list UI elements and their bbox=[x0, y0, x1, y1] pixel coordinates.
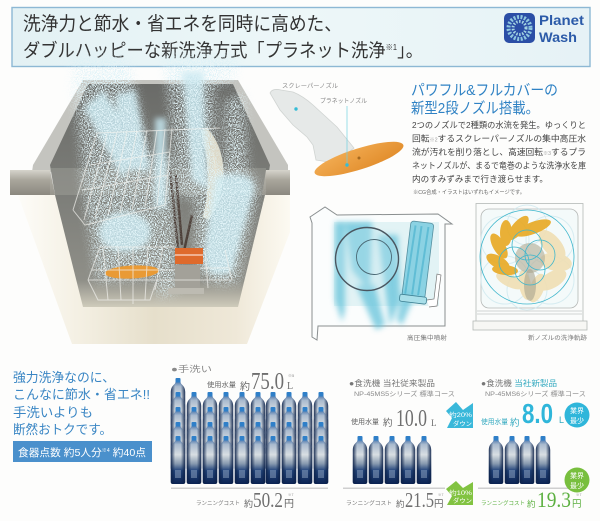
heading: 新型2段ノズル搭載。 bbox=[411, 100, 539, 117]
running cost: ※7 bbox=[438, 493, 444, 497]
orange nozzle in tub bbox=[105, 264, 159, 280]
heading: ●食洗機 当社従来製品 bbox=[349, 378, 435, 388]
title line 2: ダブルハッピーな新洗浄方式「プラネット洗浄 bbox=[23, 40, 412, 61]
model: NP-45MS5シリーズ 標準コース bbox=[354, 389, 455, 398]
title line 2: ※1 bbox=[385, 43, 398, 52]
water usage bbox=[351, 406, 436, 432]
side view diagram bbox=[310, 207, 452, 342]
running cost: 約 bbox=[527, 499, 536, 509]
badge: lowest running cost bbox=[564, 468, 590, 492]
badge: lowest water use bbox=[564, 402, 590, 428]
badge: lowest running cost: 業界 bbox=[570, 471, 584, 480]
body copy: 流が汚れを削り落とし、高速回転 ※3するプラ bbox=[412, 147, 586, 157]
upper rails bbox=[32, 80, 288, 172]
running cost: 50.2 bbox=[253, 488, 283, 512]
running cost bbox=[346, 488, 444, 512]
body copy bbox=[412, 120, 586, 184]
header banner bbox=[12, 8, 590, 66]
message text: 断然おトクです。 bbox=[13, 422, 112, 437]
trajectory caption: 新ノズルの洗浄軌跡 bbox=[528, 334, 587, 342]
running cost: ランニングコスト bbox=[346, 499, 392, 507]
title line 2: 」。 bbox=[397, 40, 423, 61]
logo wordmark bbox=[539, 12, 584, 45]
water usage: 使用水量 bbox=[351, 417, 379, 426]
cup holder bbox=[427, 274, 441, 307]
body copy: 回転※2するスクレーパーノズルの集中高圧水 bbox=[412, 134, 586, 144]
water usage bbox=[481, 398, 564, 429]
planet nozzle bbox=[311, 135, 407, 183]
water usage: 10.0 bbox=[396, 406, 427, 432]
front rim left bbox=[10, 170, 55, 195]
water usage: ※5 bbox=[288, 373, 295, 378]
water usage: 75.0 bbox=[251, 369, 284, 395]
water usage: 約 bbox=[510, 417, 520, 429]
savings message bbox=[13, 370, 152, 462]
running cost: 円 bbox=[434, 499, 444, 510]
grey centre bbox=[515, 243, 545, 273]
running cost: 円 bbox=[284, 499, 294, 510]
heading: パワフル&フルカバーの bbox=[411, 82, 558, 99]
message text: 手洗いよりも bbox=[13, 405, 93, 420]
running cost: 約 bbox=[396, 499, 405, 509]
detergent box bbox=[175, 248, 203, 264]
plate bbox=[204, 130, 220, 218]
water usage: L bbox=[559, 415, 564, 425]
planet label: プラネットノズル bbox=[320, 97, 367, 105]
dish count box: ※4 bbox=[102, 448, 110, 454]
conventional model column bbox=[343, 378, 473, 512]
running cost: 21.5 bbox=[405, 488, 434, 512]
bottles bbox=[489, 436, 550, 484]
title line 1: 洗浄力と節水・省エネを同時に高めた、 bbox=[23, 13, 342, 35]
message text: こんなに節水・省エネ!! bbox=[13, 387, 150, 402]
logo wordmark: Planet bbox=[539, 12, 584, 28]
running cost: 約 bbox=[244, 498, 253, 509]
side view caption: 高圧集中噴射 bbox=[407, 334, 447, 342]
arrow: 20% down bbox=[446, 402, 473, 428]
arrow: 10% down: 約10% bbox=[449, 488, 472, 497]
dish count box: 約40点 bbox=[110, 446, 146, 459]
dish count box bbox=[13, 441, 152, 462]
badge: lowest water use: 業界 bbox=[570, 406, 584, 415]
water usage: 使用水量 bbox=[207, 380, 236, 389]
pale petals lower right bbox=[494, 225, 573, 304]
water usage: L bbox=[287, 381, 293, 392]
nozzle description bbox=[411, 82, 586, 196]
message text: 強力洗浄なのに、 bbox=[13, 370, 115, 385]
racks bbox=[73, 128, 232, 304]
rim band bbox=[50, 168, 266, 195]
front rim right bbox=[262, 170, 290, 195]
cabinet front bbox=[18, 195, 290, 344]
water spray, speckle layer bbox=[72, 60, 258, 297]
hand washing column bbox=[171, 364, 328, 512]
nozzle illustration bbox=[270, 82, 407, 183]
orange petals upper left bbox=[484, 213, 553, 276]
arrow: 20% down: ダウン bbox=[453, 420, 472, 428]
body copy: 2つのノズルで2種類の水流を発生。ゆっくりと bbox=[412, 120, 586, 130]
cup bbox=[399, 221, 436, 304]
scraper nozzle bbox=[270, 89, 354, 163]
water usage: 8.0 bbox=[522, 398, 553, 429]
running cost: ランニングコスト bbox=[196, 499, 240, 507]
running cost: ※7 bbox=[576, 493, 582, 497]
arrow: 10% down: ダウン bbox=[453, 497, 472, 505]
running cost bbox=[196, 488, 294, 512]
water usage: 約 bbox=[383, 417, 393, 429]
body copy: 内のすみずみまで行き渡らせます。 bbox=[412, 174, 548, 184]
badge: lowest water use: 最少 bbox=[570, 416, 584, 425]
arrow: 10% down bbox=[446, 481, 473, 505]
water usage bbox=[207, 369, 295, 395]
logo wordmark: Wash bbox=[539, 29, 577, 45]
running cost: 19.3 bbox=[537, 487, 571, 512]
water spray, soft layer bbox=[84, 72, 254, 275]
model: NP-45MS6シリーズ 標準コース bbox=[485, 389, 586, 398]
water usage: 約 bbox=[240, 380, 250, 393]
bottles bbox=[353, 436, 431, 484]
faint outer orbits bbox=[481, 205, 574, 310]
new model column bbox=[478, 378, 590, 512]
plate outline bbox=[336, 228, 398, 290]
dish count box: 食器点数 約5人分 bbox=[18, 447, 100, 459]
bottles bbox=[171, 378, 328, 484]
arrow: 20% down: 約20% bbox=[449, 410, 472, 419]
tub water wash bbox=[334, 222, 439, 306]
scraper label: スクレーパーノズル bbox=[282, 82, 338, 90]
note: ※CG合成・イラストはいずれもイメージです。 bbox=[413, 188, 525, 196]
heading bbox=[411, 82, 558, 117]
water usage: L bbox=[431, 418, 436, 428]
spray trajectory diagram bbox=[473, 204, 587, 342]
blue jets bbox=[335, 222, 415, 330]
body copy: ネットノズルが、まるで竜巻のような洗浄水を庫 bbox=[412, 160, 586, 170]
tub interior bbox=[50, 84, 270, 307]
dishwasher cutaway illustration bbox=[10, 52, 290, 344]
running cost bbox=[481, 487, 582, 512]
running cost: ランニングコスト bbox=[481, 499, 525, 507]
spray above tub bbox=[68, 52, 240, 85]
heading: ●手洗い bbox=[171, 364, 212, 374]
dark cutlery bbox=[170, 170, 192, 260]
message text bbox=[13, 370, 150, 437]
badge: lowest running cost: 最少 bbox=[570, 481, 584, 490]
running cost: ※7 bbox=[288, 493, 294, 497]
cyan orbits bbox=[480, 210, 574, 304]
icon: planet wash logo bbox=[504, 13, 535, 43]
running cost: 円 bbox=[572, 499, 582, 510]
heading: ●食洗機 当社新製品 bbox=[481, 378, 557, 388]
water usage: 使用水量 bbox=[481, 417, 508, 426]
